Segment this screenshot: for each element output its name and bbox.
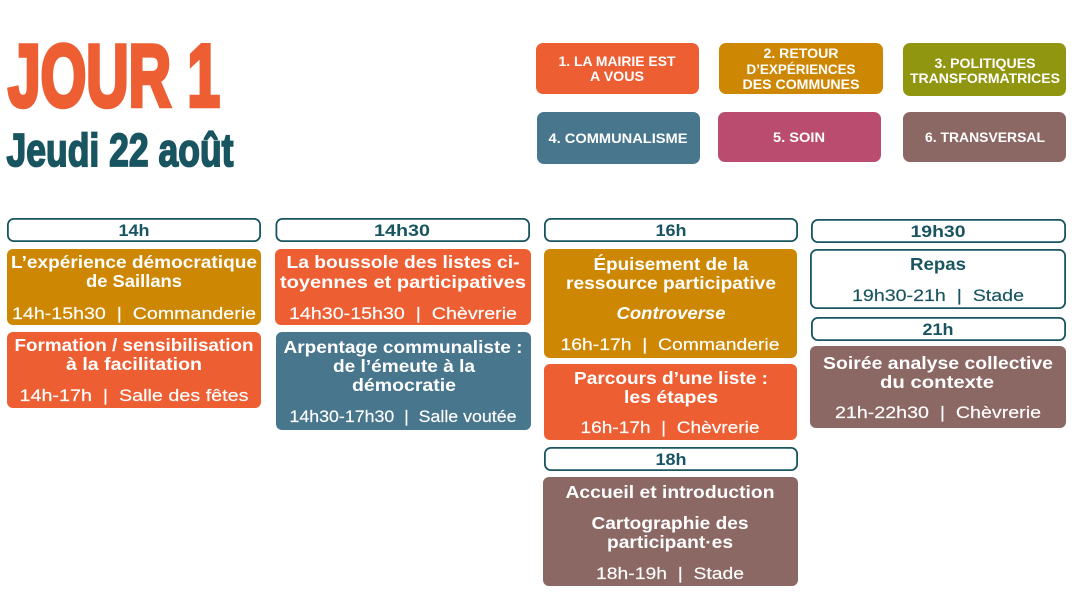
time header 21h: 21h (922, 321, 954, 339)
column: 16h and 18h (543, 219, 798, 586)
legend item 2 (719, 43, 883, 94)
legend item 6 (903, 112, 1066, 162)
column: 14h30 (275, 219, 531, 430)
column: 14h (7, 219, 261, 408)
legend item 1: A VOUS (590, 69, 644, 84)
card time and place: 14h30-15h30 | Chèvrerie (289, 305, 517, 323)
card format: controverse: Controverse (616, 303, 726, 323)
time header 14h: 14h (118, 222, 150, 240)
column: 19h30 and 21h (810, 220, 1066, 428)
card title: ressource participative (566, 273, 776, 293)
card time and place: 19h30-21h | Stade (852, 287, 1024, 305)
title: Jour 1: JOUR 1 (8, 26, 220, 125)
card: repas (811, 250, 1065, 308)
card title: Parcours d’une liste : (574, 368, 768, 388)
card: arpentage communaliste (276, 332, 531, 430)
legend item 3: 3. POLITIQUES (934, 56, 1036, 71)
card title: Épuisement de la (594, 253, 749, 274)
card time and place: 21h-22h30 | Chèvrerie (835, 404, 1041, 422)
card time and place: 16h-17h | Chèvrerie (580, 419, 760, 437)
card title (823, 353, 1053, 392)
card title: Accueil et introduction (566, 482, 774, 502)
legend item 2: DES COMMUNES (742, 77, 860, 92)
card title: La boussole des listes ci- (286, 252, 520, 272)
legend item 5: 5. SOIN (773, 130, 825, 145)
card title: Formation / sensibilisation (14, 335, 254, 355)
card title: Cartographie des (592, 513, 749, 533)
time header 16h: 16h (656, 222, 686, 240)
card title (566, 482, 774, 552)
legend item 4: 4. COMMUNALISME (548, 131, 688, 146)
card title: démocratie (352, 375, 456, 395)
card time and place: 14h-17h | Salle des fêtes (20, 387, 248, 405)
card title: L’expérience démocratique (11, 252, 257, 272)
legend item 2: D’EXPÉRIENCES (746, 62, 856, 77)
card time and place: 14h-15h30 | Commanderie (12, 305, 256, 323)
card title (11, 252, 257, 291)
time header 19h30 (812, 220, 1065, 242)
legend item 5 (718, 112, 881, 162)
legend item 2: 2. RETOUR (764, 46, 839, 61)
card title (284, 337, 522, 395)
card title: Repas (910, 254, 966, 274)
legend item 3: TRANSFORMATRICES (910, 71, 1060, 86)
card title (280, 252, 526, 292)
card title (14, 335, 254, 374)
card time and place: 14h30-17h30 | Salle voutée (290, 408, 516, 426)
time header 16h (545, 219, 797, 241)
card title: de l’émeute à la (333, 356, 475, 376)
card title: les étapes (624, 387, 718, 407)
card title (574, 368, 768, 407)
subtitle: date: Jeudi 22 août (6, 124, 234, 176)
time header 14h (8, 219, 260, 241)
legend item 4 (537, 112, 700, 164)
legend item 1 (536, 43, 699, 94)
legend item 1: 1. LA MAIRIE EST (558, 54, 676, 69)
time header 18h (545, 448, 797, 470)
card title: de Saillans (86, 271, 182, 291)
legend: themes (536, 43, 1066, 164)
card: parcours d'une liste (544, 364, 797, 440)
legend item 3 (903, 43, 1066, 96)
card time and place: 18h-19h | Stade (596, 565, 744, 583)
card title: Arpentage communaliste : (284, 337, 522, 357)
card: soirée analyse collective (810, 346, 1066, 428)
card: formation facilitation (7, 332, 261, 408)
card: expérience démocratique de Saillans (7, 249, 261, 325)
card title: du contexte (880, 372, 994, 392)
time header 19h30: 19h30 (910, 223, 966, 241)
card time and place: 16h-17h | Commanderie (560, 336, 780, 354)
card title: Soirée analyse collective (823, 353, 1053, 373)
time header 14h30 (276, 219, 529, 241)
time header 14h30: 14h30 (374, 222, 430, 240)
card: épuisement de la ressource participative (544, 249, 797, 358)
card: boussole des listes (275, 249, 531, 325)
card title: à la facilitation (66, 354, 202, 374)
card title: toyennes et participatives (280, 272, 526, 292)
card: accueil et introduction (543, 477, 798, 586)
legend item 6: 6. TRANSVERSAL (925, 130, 1045, 145)
card title: participant·es (607, 532, 733, 552)
time header 21h (812, 318, 1065, 340)
time header 18h: 18h (656, 451, 686, 469)
card title (566, 253, 776, 293)
